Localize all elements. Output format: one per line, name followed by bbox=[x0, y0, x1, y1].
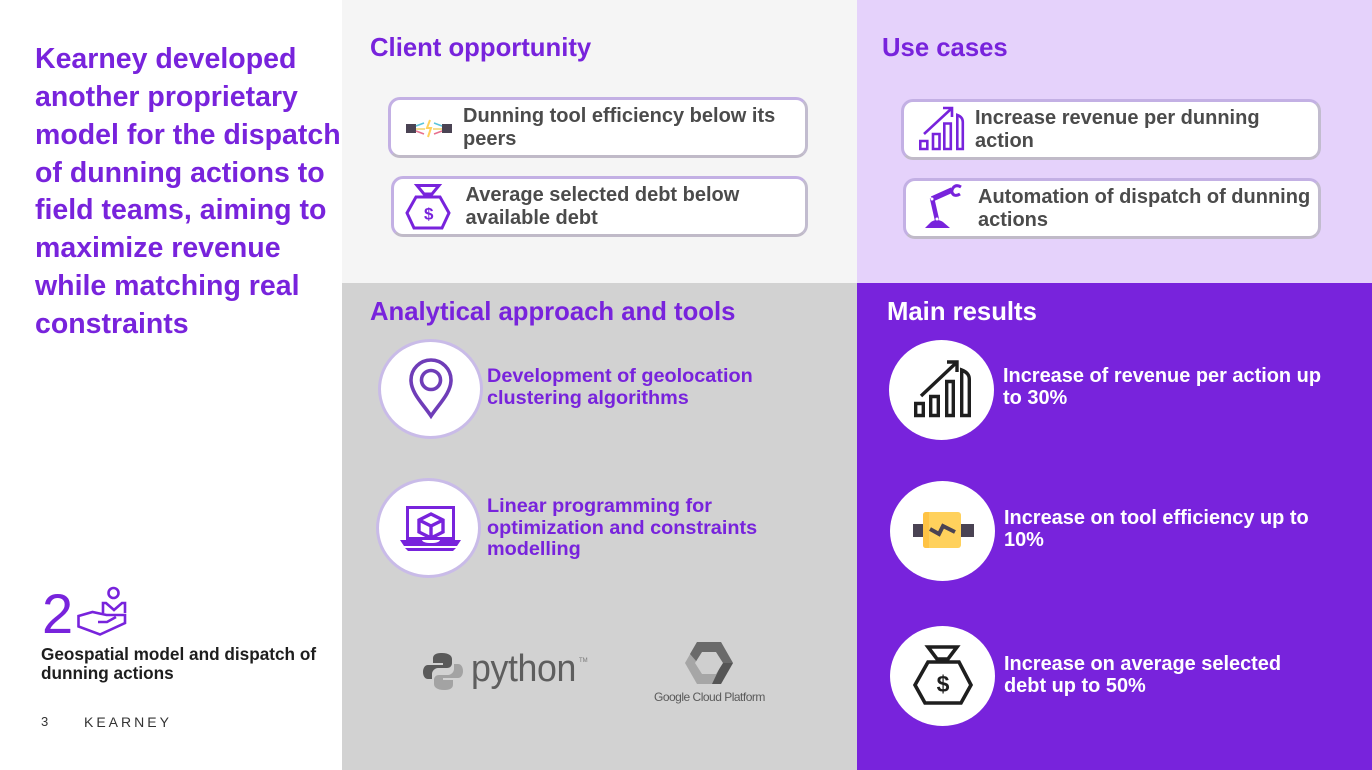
panel: client opportunity bbox=[342, 0, 857, 283]
page number: 3 bbox=[41, 714, 48, 729]
title: another proprietary bbox=[35, 81, 298, 113]
text: debt result bbox=[1004, 653, 1281, 697]
icon: location pin bbox=[409, 358, 453, 420]
title bbox=[34, 43, 341, 340]
title: while matching real bbox=[35, 270, 300, 302]
title: maximize revenue bbox=[35, 232, 281, 264]
title: field teams, aiming to bbox=[35, 194, 326, 226]
text: average selected debt bbox=[466, 184, 740, 228]
text: automation: Automation of dispatch of dunning bbox=[978, 186, 1310, 208]
logo: google cloud platform bbox=[654, 642, 765, 704]
card: automation bbox=[903, 178, 1321, 239]
section label: dunning actions bbox=[41, 662, 174, 682]
icon: money bag bbox=[913, 645, 973, 705]
text: revenue result: Increase of revenue per action up bbox=[1003, 365, 1321, 387]
card: dunning tool efficiency bbox=[388, 97, 808, 158]
text: dunning tool efficiency: peers bbox=[463, 128, 516, 150]
text: automation bbox=[978, 186, 1310, 230]
text: linear programming: modelling bbox=[487, 538, 581, 560]
icon: rising bars bbox=[919, 106, 964, 150]
icon: laptop with cube bbox=[400, 506, 461, 551]
trademark: TM bbox=[579, 658, 588, 664]
card: average selected debt bbox=[391, 176, 808, 237]
circle: efficiency icon bbox=[890, 481, 995, 581]
text: debt result: debt up to 50% bbox=[1004, 675, 1146, 697]
panel: use cases bbox=[857, 0, 1372, 283]
circle: location pin bbox=[378, 339, 483, 439]
icon: robot arm bbox=[925, 184, 962, 228]
circle: laptop bbox=[376, 478, 481, 578]
text: dunning tool efficiency bbox=[463, 104, 775, 150]
text: average selected debt: available debt bbox=[466, 206, 598, 228]
title: model for the dispatch bbox=[35, 119, 341, 151]
circle: debt icon bbox=[890, 626, 995, 726]
card: increase revenue bbox=[901, 99, 1321, 160]
panel: main results bbox=[857, 283, 1372, 770]
icon: broken cable bbox=[406, 120, 452, 138]
heading: client opportunity: Client opportunity bbox=[370, 34, 591, 62]
text: geolocation clustering: Development of geolocation bbox=[487, 365, 753, 387]
text: efficiency result: Increase on tool efficiency up to bbox=[1004, 507, 1309, 529]
text: revenue result bbox=[1003, 365, 1321, 409]
text: increase revenue: Increase revenue per dunning bbox=[975, 106, 1260, 128]
text: increase revenue bbox=[975, 106, 1260, 152]
section label bbox=[41, 644, 316, 682]
section label: Geospatial model and dispatch of bbox=[41, 644, 316, 664]
logo: python bbox=[423, 648, 588, 690]
text: revenue result: to 30% bbox=[1003, 387, 1067, 409]
icon: yellow connector bbox=[913, 512, 974, 548]
text: debt result: Increase on average selected bbox=[1004, 653, 1281, 675]
icon: rising bars bbox=[914, 360, 971, 418]
icon: money bag: $ bbox=[424, 204, 434, 224]
icon: hexagon bbox=[685, 642, 733, 684]
text: linear programming bbox=[487, 495, 757, 560]
text: linear programming: optimization and constraints bbox=[487, 517, 757, 539]
icon: hand with location person bbox=[77, 586, 126, 636]
text: automation: actions bbox=[978, 208, 1048, 230]
section number: 2 bbox=[42, 582, 73, 645]
text: efficiency result: 10% bbox=[1004, 529, 1044, 551]
title: of dunning actions to bbox=[35, 157, 325, 189]
footer logo: Kearney: KEARNEY bbox=[84, 714, 172, 730]
heading: analytical approach: Analytical approach and tools bbox=[370, 298, 735, 326]
circle: revenue icon bbox=[889, 340, 994, 440]
text: increase revenue: action bbox=[975, 130, 1034, 152]
icon: money bag: $ bbox=[937, 671, 950, 697]
wordmark: google cloud platform: Google Cloud Platform bbox=[654, 690, 765, 704]
panel: analytical approach and tools bbox=[342, 283, 857, 770]
title: constraints bbox=[35, 308, 189, 340]
icon: money bag bbox=[405, 184, 451, 230]
text: average selected debt: Average selected debt below bbox=[466, 184, 739, 206]
text: linear programming: Linear programming for bbox=[487, 495, 712, 517]
text: dunning tool efficiency: Dunning tool efficiency below its bbox=[463, 104, 775, 126]
wordmark: python: python bbox=[471, 648, 576, 690]
icon: python snakes bbox=[423, 653, 463, 690]
heading: main results: Main results bbox=[887, 298, 1037, 326]
heading: use cases: Use cases bbox=[882, 34, 1008, 62]
title: Kearney developed bbox=[35, 43, 296, 75]
text: efficiency result bbox=[1004, 507, 1309, 551]
text: geolocation clustering: clustering algorithms bbox=[487, 387, 689, 409]
text: geolocation clustering bbox=[487, 365, 753, 409]
